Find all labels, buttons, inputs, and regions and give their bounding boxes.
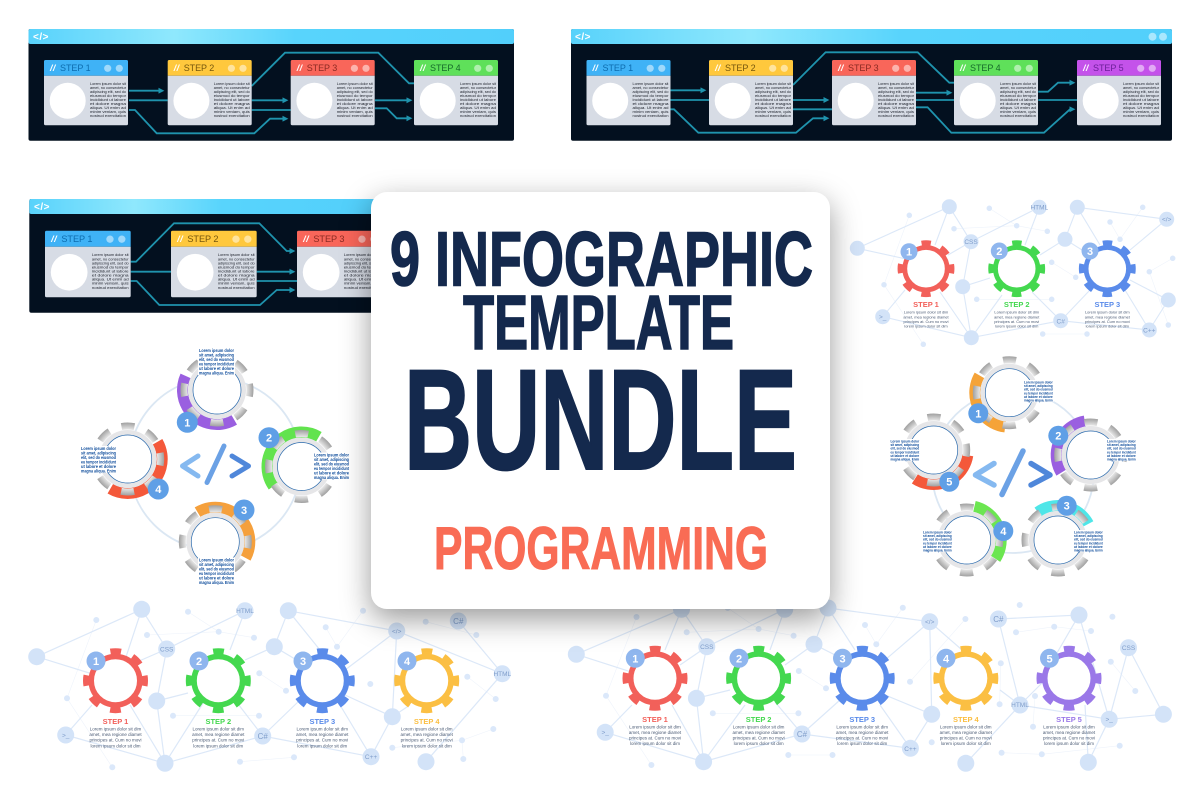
- network background: C#: [993, 615, 1004, 624]
- gear step 2: STEP 2: [205, 717, 231, 726]
- gear step 3: amet, mea regione diamet: [296, 732, 349, 737]
- gear step 1: principes at. Cum no movi: [629, 736, 681, 740]
- gear step 4: 4: [404, 656, 411, 668]
- step card 2: //: [176, 234, 184, 244]
- network background: HTML: [1011, 702, 1029, 709]
- header bar: [28, 29, 514, 44]
- gear step 1: 1: [632, 653, 638, 665]
- gear step 2: lorem ipsum dolor sit dim: [995, 324, 1038, 329]
- gear step 3: [293, 652, 351, 748]
- panel: central title card: [371, 192, 830, 609]
- gear step 3: lorem ipsum dolor sit dim: [837, 741, 887, 746]
- gear 1: 1: [184, 418, 190, 430]
- gear step 1: lorem ipsum dolor sit dim: [90, 744, 141, 748]
- gear 2: 2: [266, 433, 272, 445]
- gear step 3: lorem ipsum dolor sit dim: [297, 744, 348, 748]
- gear step 1: STEP 1: [103, 717, 128, 726]
- gear step 1: STEP 1: [642, 715, 668, 724]
- gear step 2: amet, mea regione diamet: [192, 732, 245, 737]
- step card 3: STEP 3: [307, 63, 338, 73]
- network background: C#: [797, 730, 808, 739]
- gear step 3: STEP 3: [1094, 300, 1120, 309]
- gear step 1: [900, 243, 951, 329]
- gear step 1: STEP 1: [913, 300, 939, 309]
- gear step 2: lorem ipsum dolor sit dim: [193, 744, 244, 748]
- gear step 5: lorem ipsum dolor sit dim: [1044, 741, 1094, 746]
- code tag icon: </>: [34, 202, 50, 213]
- connector arrows: [129, 53, 414, 133]
- gear step 4: amet, mea regione diamet: [401, 732, 454, 737]
- gear step 2: amet, mea regione diamet: [994, 314, 1040, 319]
- gear step 1: amet, mea regione diamet: [629, 730, 682, 735]
- network background: </>: [392, 628, 402, 636]
- gear step 5: [1040, 649, 1098, 746]
- step card 2: [168, 60, 252, 125]
- gear step 2: 2: [196, 656, 202, 668]
- step card 3: [291, 60, 375, 125]
- network background: >_: [62, 732, 70, 740]
- gear step 1: [626, 649, 684, 746]
- network background: CSS: [964, 239, 978, 246]
- gear 3: [1010, 492, 1106, 588]
- step card 3: [832, 60, 916, 125]
- step card 3: //: [837, 63, 845, 73]
- code tag icon: </>: [575, 32, 591, 43]
- gear 4: [80, 412, 175, 506]
- step card 1: [45, 231, 131, 297]
- icon: code brackets: [182, 446, 248, 482]
- network background: HTML: [236, 608, 254, 615]
- gear step 2: [189, 652, 247, 748]
- gear 5: [890, 411, 973, 492]
- gear step 2: 2: [996, 246, 1002, 258]
- step card 4: STEP 4: [970, 63, 1001, 73]
- gear step 1: 1: [93, 656, 99, 668]
- step card 2: STEP 2: [725, 63, 756, 73]
- panel: five step flow: [571, 29, 1172, 141]
- network background: CSS: [700, 644, 714, 651]
- gear step 4: [936, 649, 995, 746]
- network background: >_: [1105, 716, 1113, 724]
- gear step 3: [833, 649, 891, 746]
- step card 1: [44, 60, 128, 125]
- network background: C++: [365, 754, 377, 761]
- network background: CSS: [160, 646, 174, 654]
- connector arrows: [131, 223, 297, 305]
- step card 5: STEP 5: [1093, 63, 1124, 73]
- step card 1: STEP 1: [602, 63, 634, 73]
- gear 4: 4: [155, 484, 162, 496]
- network background: [37, 608, 512, 767]
- gear step 4: lorem ipsum dolor sit dim: [941, 741, 991, 746]
- panel: three gear network: [857, 204, 1173, 344]
- gear step 3: STEP 3: [849, 715, 875, 724]
- gear step 3: principes at. Cum no movi: [836, 736, 888, 740]
- gear step 2: amet, mea regione diamet: [732, 730, 785, 735]
- gear step 1: principes at. Cum no movi: [904, 319, 949, 324]
- gear step 3: 3: [839, 653, 846, 665]
- gear step 4: 4: [943, 653, 950, 665]
- gear step 1: 1: [906, 246, 912, 258]
- code tag icon: </>: [33, 32, 49, 43]
- gear step 4: Lorem ipsum dolor sit dim: [940, 724, 992, 730]
- gear 2: [253, 418, 350, 515]
- gear step 1: amet, mea regione diamet: [89, 732, 142, 737]
- gear step 2: Lorem ipsum dolor sit dim: [994, 310, 1039, 314]
- step card 3: STEP 3: [313, 234, 345, 244]
- network background: C++: [904, 746, 917, 753]
- gear step 4: lorem ipsum dolor sit dim: [402, 744, 452, 748]
- step card 4: STEP 4: [430, 63, 461, 73]
- step card 2: [709, 60, 793, 125]
- gear step 3: Lorem ipsum dolor sit dim: [297, 726, 348, 732]
- panel: five gear network: [576, 605, 1163, 765]
- gear step 3: Lorem ipsum dolor sit dim: [836, 724, 888, 730]
- gear step 3: principes at. Cum no movi: [1085, 319, 1130, 324]
- gear step 3: Lorem ipsum dolor sit dim: [1085, 310, 1130, 314]
- gear step 4: Lorem ipsum dolor sit dim: [401, 726, 453, 732]
- gear 4: 4: [1000, 526, 1007, 538]
- step card 4: //: [419, 63, 427, 73]
- network background: CSS: [1122, 645, 1136, 652]
- step card 3: [297, 231, 383, 297]
- step card 1: [586, 60, 670, 125]
- gear step 2: principes at. Cum no movi: [733, 736, 785, 740]
- title line: bundle: BUNDLE: [404, 341, 797, 500]
- gear step 2: Lorem ipsum dolor sit dim: [733, 724, 785, 730]
- gear 1: [170, 343, 264, 437]
- gear step 2: [730, 649, 788, 746]
- panel: four gear network: [37, 608, 512, 767]
- gear 2: 2: [1055, 431, 1061, 443]
- gear 3: [168, 494, 263, 589]
- gear 1: [968, 354, 1054, 431]
- gear step 3: principes at. Cum no movi: [296, 738, 348, 743]
- panel: five gear cycle: [890, 354, 1138, 588]
- gear step 1: Lorem ipsum dolor sit dim: [629, 724, 681, 730]
- gear step 1: Lorem ipsum dolor sit dim: [90, 726, 142, 732]
- gear step 1: principes at. Cum no movi: [89, 738, 142, 743]
- gear step 4: principes at. Cum no movi: [401, 738, 453, 743]
- gear 5: 5: [946, 477, 952, 489]
- gear step 2: 2: [736, 653, 742, 665]
- gear step 2: STEP 2: [1004, 300, 1030, 309]
- gear step 3: lorem ipsum dolor sit dim: [1086, 324, 1129, 329]
- gear step 2: principes at. Cum no movi: [994, 319, 1039, 324]
- gear 3: 3: [241, 505, 247, 517]
- subtitle: programming: PROGRAMMING: [434, 515, 768, 582]
- gear step 2: STEP 2: [746, 715, 771, 724]
- step card 3: STEP 3: [848, 63, 879, 73]
- window dots: [1148, 33, 1167, 41]
- panel: four step flow: [28, 29, 514, 141]
- gear step 3: 3: [300, 656, 306, 668]
- step card 3: //: [302, 234, 310, 244]
- gear 2: [1043, 408, 1138, 502]
- header bar: [571, 29, 1172, 44]
- title line: template: TEMPLATE: [463, 280, 734, 366]
- gear step 4: STEP 4: [953, 715, 979, 724]
- step card 1: STEP 1: [60, 63, 91, 73]
- step card 2: STEP 2: [184, 63, 215, 73]
- step card 4: [414, 60, 498, 125]
- network background: HTML: [1030, 204, 1049, 212]
- step card 5: [1077, 60, 1161, 125]
- network background: HTML: [493, 671, 512, 678]
- header bar: [29, 199, 379, 214]
- gear step 5: principes at. Cum no movi: [1043, 736, 1095, 740]
- step card 1: //: [592, 63, 599, 73]
- gear step 1: lorem ipsum dolor sit dim: [630, 741, 680, 746]
- icon: code brackets: [976, 451, 1050, 494]
- panel: three step flow: [29, 199, 383, 313]
- gear step 2: [991, 242, 1042, 329]
- step card 2: //: [714, 63, 722, 73]
- step card 5: //: [1082, 63, 1090, 73]
- gear 4: [922, 499, 1013, 581]
- step card 2: [171, 231, 257, 297]
- gear step 4: principes at. Cum no movi: [940, 736, 992, 740]
- step card 4: [954, 60, 1038, 125]
- step card 2: //: [173, 63, 181, 73]
- network background: >_: [879, 314, 887, 321]
- network background: [576, 605, 1163, 765]
- connector arrows: [670, 52, 1077, 133]
- gear step 2: principes at. Cum no movi: [192, 738, 244, 743]
- network background: C#: [258, 732, 268, 741]
- gear step 5: amet, mea regione diamet: [1043, 730, 1096, 735]
- network background: C#: [1057, 318, 1065, 326]
- network background: [857, 204, 1173, 344]
- step card 2: STEP 2: [187, 234, 219, 244]
- gear step 2: Lorem ipsum dolor sit dim: [193, 726, 244, 732]
- gear step 4: amet, mea regione diamet: [940, 730, 993, 735]
- gear step 5: STEP 5: [1056, 715, 1082, 724]
- gear step 4: STEP 4: [414, 717, 440, 726]
- gear step 1: amet, mea regione diamet: [903, 314, 950, 319]
- step card 4: //: [959, 63, 967, 73]
- gear step 3: 3: [1087, 246, 1093, 258]
- panel: four gear cycle: [80, 343, 350, 589]
- gear 1: 1: [975, 408, 981, 420]
- step card 3: //: [296, 63, 304, 73]
- gear step 1: lorem ipsum dolor sit dim: [904, 324, 948, 329]
- gear step 3: [1082, 242, 1133, 329]
- network background: </>: [1162, 216, 1172, 224]
- title line: 9 infographic: 9 INFOGRAPHIC: [390, 216, 813, 302]
- network background: </>: [925, 619, 935, 626]
- gear step 4: [398, 652, 456, 748]
- step card 1: STEP 1: [61, 234, 93, 244]
- gear step 2: lorem ipsum dolor sit dim: [734, 741, 784, 746]
- gear step 3: amet, mea regione diamet: [1085, 314, 1131, 319]
- gear step 1: [86, 652, 144, 748]
- gear 3: 3: [1064, 501, 1070, 513]
- gear step 3: amet, mea regione diamet: [836, 730, 889, 735]
- gear step 3: STEP 3: [309, 717, 335, 726]
- step card 1: //: [50, 234, 58, 244]
- network background: C#: [453, 617, 464, 626]
- network background: C++: [1143, 328, 1156, 334]
- gear step 5: 5: [1046, 653, 1053, 665]
- gear step 5: Lorem ipsum dolor sit dim: [1043, 724, 1095, 730]
- step card 1: //: [49, 63, 57, 73]
- gear step 1: Lorem ipsum dolor sit dim: [904, 310, 948, 314]
- network background: >_: [601, 730, 609, 736]
